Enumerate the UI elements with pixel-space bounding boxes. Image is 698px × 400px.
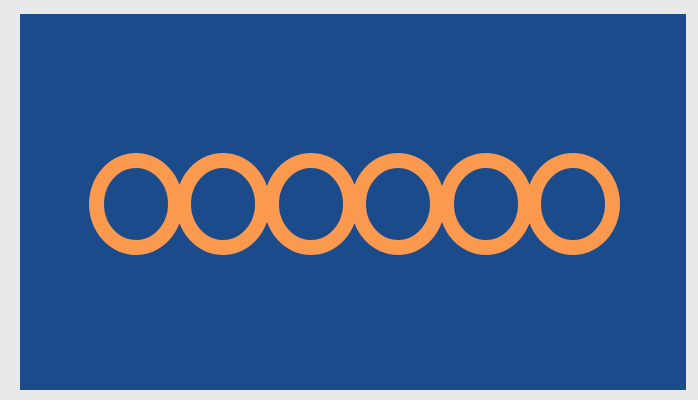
rings chain	[96, 160, 612, 248]
